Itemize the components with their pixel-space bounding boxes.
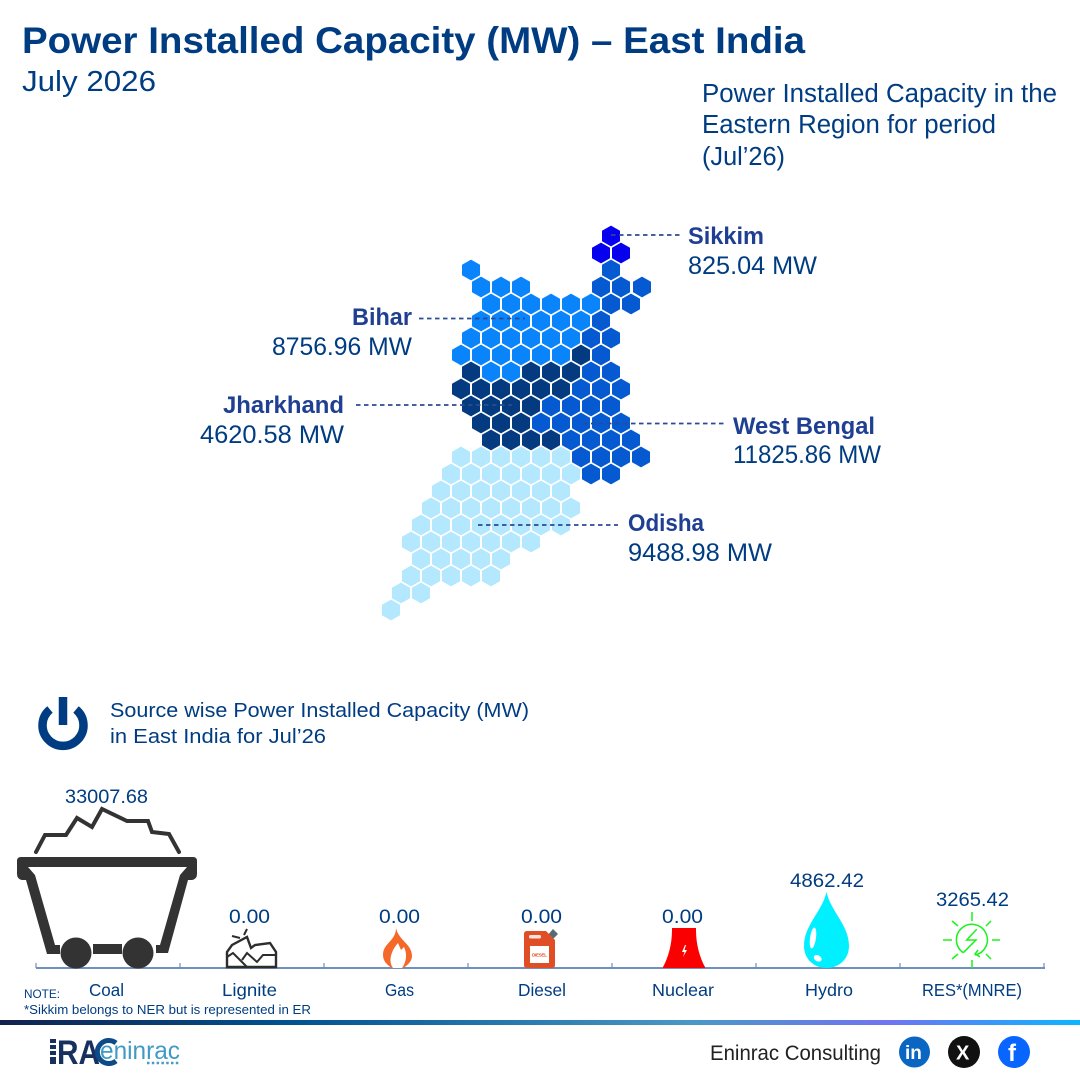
label: coal: Coal (89, 980, 124, 1000)
value: RES: 3265.42 (936, 890, 1009, 911)
icon: X (948, 1036, 980, 1068)
logo: eninrac (50, 1034, 180, 1072)
value: gas: 0.00 (379, 907, 420, 928)
icon: diesel can: DIESEL (532, 952, 547, 958)
callout: West Bengal (583, 413, 881, 469)
label: hydro: Hydro (805, 980, 853, 1000)
callout: Odisha (478, 510, 772, 567)
region: Bihar (452, 260, 600, 382)
icon: X: X (956, 1042, 970, 1064)
gradient divider bar (0, 1020, 1080, 1025)
region: Odisha (382, 447, 580, 620)
callout: West Bengal: West Bengal (733, 413, 875, 440)
section heading: source wise capacity (110, 699, 529, 748)
icon: facebook: f (1008, 1040, 1017, 1067)
note: NOTE: (24, 989, 60, 1001)
value: diesel: 0.00 (521, 907, 562, 928)
icon: gas flame (383, 928, 412, 968)
icon: lignite (227, 929, 276, 967)
icon: coal cart (17, 809, 197, 968)
icon: linkedin: in (905, 1043, 922, 1064)
icon: diesel can (524, 929, 558, 968)
icon: hydro drop (804, 892, 849, 968)
callout: Bihar (272, 304, 525, 361)
logo: eninrac: eninrac (100, 1037, 180, 1065)
map description: Eastern Region for period (702, 111, 996, 139)
map description (702, 80, 1057, 171)
value: lignite: 0.00 (229, 907, 270, 928)
icon: facebook (998, 1036, 1030, 1068)
label: nuclear: Nuclear (652, 980, 714, 1000)
callout: Bihar: 8756.96 MW (272, 333, 412, 361)
map description: (Jul’26) (702, 143, 785, 171)
axis (36, 963, 1045, 968)
label: gas: Gas (385, 980, 414, 1000)
region: Sikkim (592, 226, 630, 263)
label: diesel: Diesel (518, 980, 566, 1000)
hex map: East India (382, 226, 651, 620)
value: nuclear: 0.00 (662, 907, 703, 928)
callout: Sikkim (611, 223, 817, 280)
value: hydro: 4862.42 (790, 871, 864, 892)
note (24, 989, 311, 1017)
section heading: source wise capacity: in East India for Jul’26 (110, 725, 326, 748)
region: West Bengal (532, 260, 651, 484)
callout: Jharkhand (200, 392, 512, 449)
map description: Power Installed Capacity in the (702, 80, 1057, 108)
callout: Bihar: Bihar (352, 304, 412, 331)
value: coal: 33007.68 (65, 787, 148, 808)
subtitle: date: July 2026 (22, 66, 156, 98)
title: Power Installed Capacity (MW) – East India (22, 20, 805, 61)
logo: eninrac: RA (57, 1034, 100, 1072)
icon: power symbol (43, 697, 83, 746)
callout: Odisha: Odisha (628, 510, 705, 537)
callout: Jharkhand: 4620.58 MW (200, 421, 344, 449)
section heading: source wise capacity: Source wise Power Installed Capacity (MW) (110, 699, 529, 722)
icon: nuclear cooling tower (663, 928, 705, 968)
note: *Sikkim belongs to NER but is represented in ER (24, 1003, 311, 1017)
icon: linkedin (899, 1036, 930, 1068)
callout: West Bengal: 11825.86 MW (733, 441, 881, 469)
callout: Jharkhand: Jharkhand (223, 392, 344, 419)
footer brand name: Eninrac Consulting (710, 1042, 881, 1065)
icon: renewable sun (943, 912, 1000, 968)
callout: Odisha: 9488.98 MW (628, 539, 772, 567)
label: lignite: Lignite (222, 980, 277, 1000)
label: RES: RES*(MNRE) (922, 980, 1022, 1000)
region: Jharkhand (452, 345, 590, 450)
callout: Sikkim: 825.04 MW (688, 252, 817, 280)
callout: Sikkim: Sikkim (688, 223, 764, 250)
